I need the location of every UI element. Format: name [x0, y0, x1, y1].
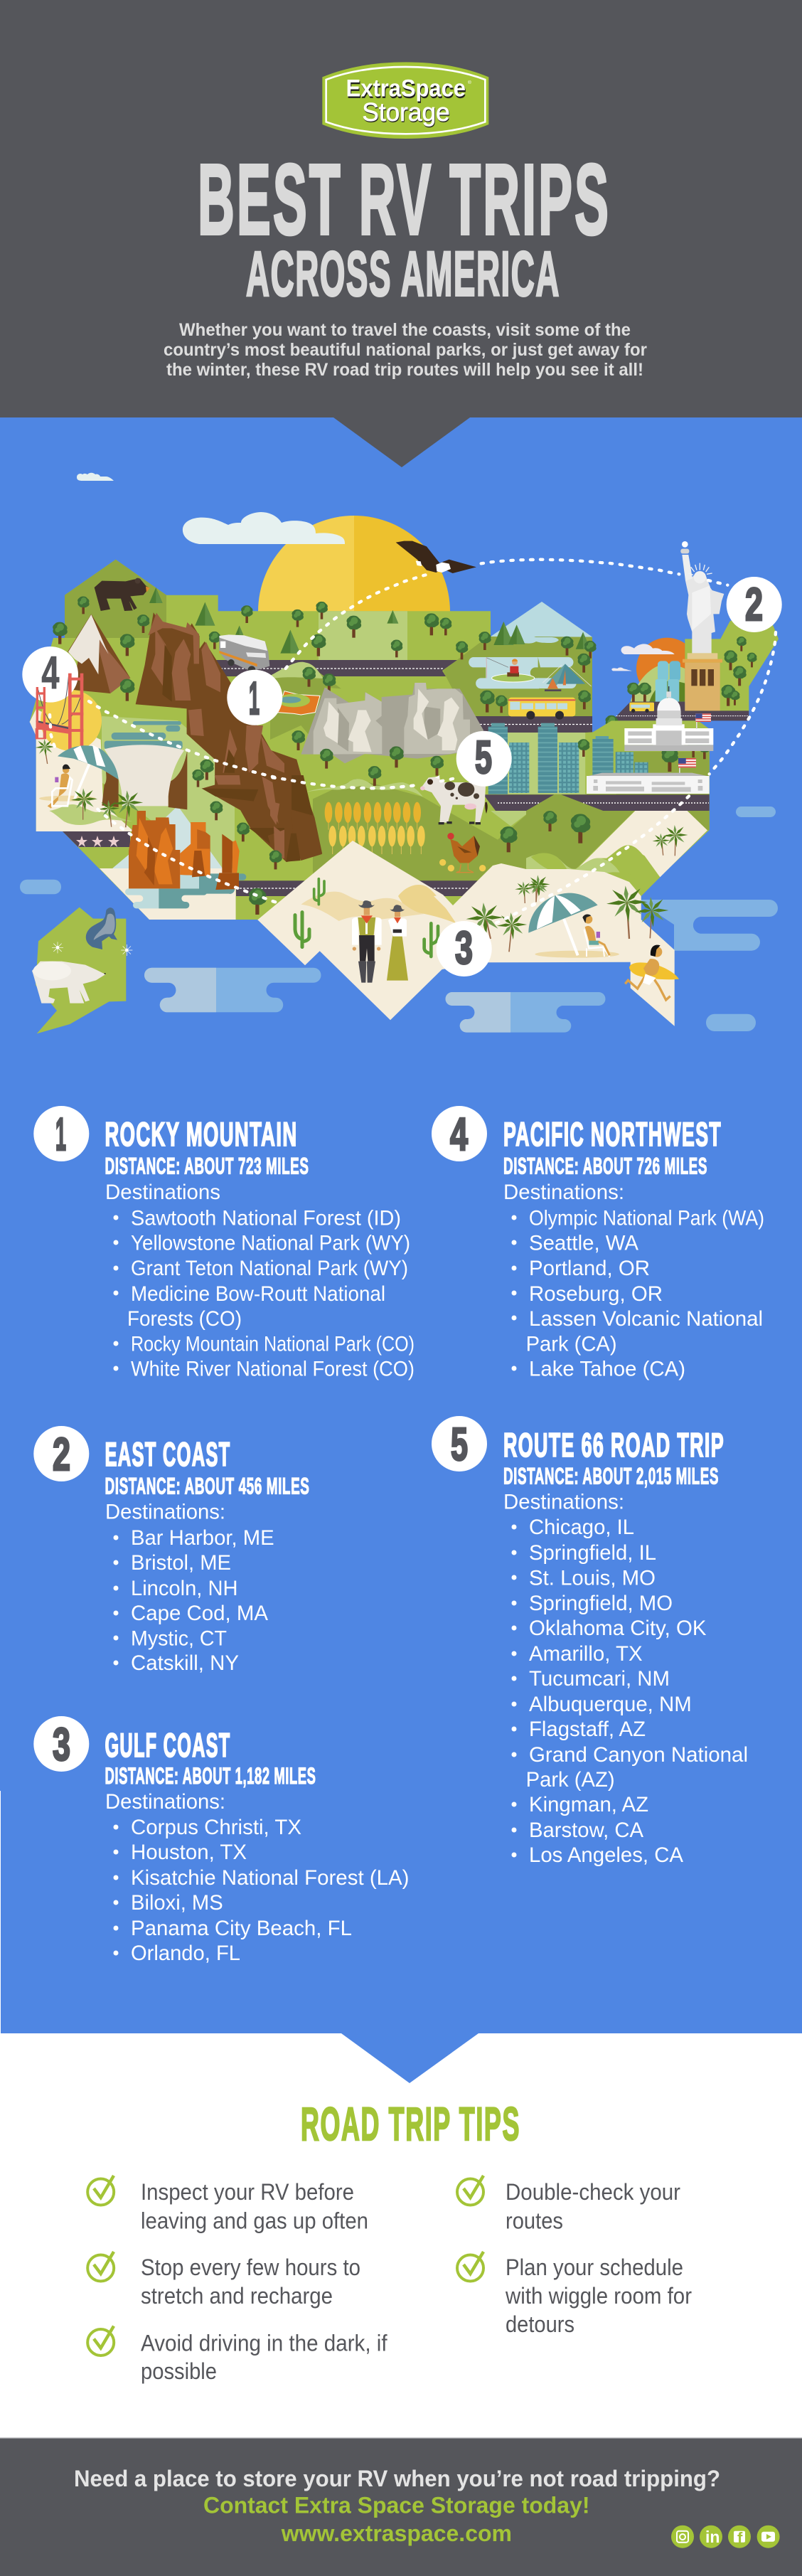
- destination list: Kisatchie National Forest (LA): [131, 1866, 410, 1890]
- intro paragraph: country’s most beautiful national parks, or just get away for: [164, 340, 647, 360]
- map marker 2: 2: [745, 578, 763, 630]
- social icon: linkedin: [700, 2526, 722, 2548]
- large cloud: [183, 512, 345, 544]
- mount rushmore: [301, 683, 483, 763]
- chicken and chicks: [439, 833, 486, 873]
- rock formation: red rocks: [129, 811, 240, 890]
- footer call to action: [74, 2466, 720, 2546]
- rock formation: rocky mountains: [136, 612, 322, 862]
- small bus: [629, 703, 654, 713]
- footer call to action: www.extraspace.com: [281, 2521, 512, 2546]
- alaska: [36, 908, 126, 1033]
- badge 3: 3: [53, 1718, 70, 1770]
- cowboy couple: [352, 900, 408, 983]
- tip 3: [87, 2326, 387, 2384]
- social icon: youtube: [757, 2526, 780, 2548]
- river: [105, 721, 183, 749]
- badge 5: 5: [451, 1418, 468, 1470]
- destination list: Park (AZ): [526, 1768, 615, 1792]
- panel: route 66: [432, 1416, 748, 1867]
- panel: gulf coast route: [33, 1716, 410, 1965]
- destination list: Forests (CO): [127, 1307, 242, 1331]
- destination list: Orlando, FL: [131, 1942, 240, 1965]
- us capitol: [624, 686, 713, 751]
- destination list: Destinations:: [105, 1501, 225, 1524]
- road over farmland: [309, 880, 478, 896]
- polar bear: [32, 962, 106, 1004]
- tip 1: [87, 2176, 368, 2234]
- destination list: Destinations:: [503, 1490, 624, 1513]
- distance: DISTANCE: ABOUT 723 MILES: [105, 1154, 309, 1179]
- badge 5: [432, 1416, 487, 1471]
- distance: DISTANCE: ABOUT 456 MILES: [105, 1474, 310, 1499]
- wheat field: [325, 802, 425, 854]
- destination list: Tucumcari, NM: [529, 1667, 670, 1691]
- route dashes: [50, 560, 776, 925]
- sea patch: gulf of mexico: [446, 992, 606, 1033]
- tip 5: with wiggle room for: [505, 2283, 692, 2309]
- destination list: [105, 1790, 410, 1965]
- statue of liberty on pedestal: [680, 541, 724, 710]
- sea pills: [20, 807, 776, 1031]
- destination list: Amarillo, TX: [529, 1642, 643, 1666]
- destination list: Rocky Mountain National Park (CO): [131, 1333, 415, 1356]
- tip 3: possible: [141, 2358, 217, 2384]
- destination list: Mystic, CT: [131, 1627, 227, 1650]
- map marker 1: 1: [249, 672, 260, 724]
- yellowstone hot spring: [270, 662, 341, 740]
- roads: [63, 660, 710, 896]
- panel: pacific northwest route: [432, 1106, 764, 1381]
- map marker 4: [22, 646, 78, 703]
- map: USA land: [30, 560, 710, 920]
- badge 1: 1: [55, 1108, 66, 1160]
- footer call to action: Contact Extra Space Storage today!: [203, 2493, 590, 2518]
- destination list: Bristol, ME: [131, 1551, 231, 1575]
- destination list: Flagstaff, AZ: [529, 1718, 646, 1741]
- destination list: Kingman, AZ: [529, 1793, 648, 1816]
- destination list: Corpus Christi, TX: [131, 1816, 301, 1839]
- tip 4: Double-check your: [506, 2179, 680, 2205]
- destination list: [105, 1501, 274, 1675]
- destination list: St. Louis, MO: [529, 1567, 656, 1590]
- destination list: Grand Canyon National: [529, 1743, 748, 1767]
- badge 2: [33, 1426, 89, 1481]
- destination list: Biloxi, MS: [131, 1891, 223, 1915]
- beach umbrella and sunbather: [528, 893, 619, 958]
- tip 4: routes: [506, 2208, 563, 2234]
- destination list: Yellowstone National Park (WY): [131, 1232, 410, 1255]
- campsite tent and fire: [542, 664, 592, 691]
- heading: EAST COAST: [105, 1435, 230, 1473]
- blue section background: [0, 417, 802, 2033]
- social icon: facebook: [728, 2526, 751, 2548]
- tip 3: Avoid driving in the dark, if: [141, 2330, 387, 2356]
- check icon: [87, 2176, 114, 2205]
- destination list: Cape Cod, MA: [131, 1602, 268, 1625]
- sun: [258, 516, 450, 612]
- tip 5: [457, 2252, 692, 2337]
- intro paragraph: Whether you want to travel the coasts, visit some of the: [179, 320, 631, 340]
- eagle: [396, 541, 476, 573]
- check icon: [457, 2176, 483, 2205]
- golden gate bridge: [36, 674, 83, 749]
- badge 4: 4: [450, 1108, 468, 1160]
- tip 1: Inspect your RV before: [141, 2179, 354, 2205]
- badge 2: 2: [53, 1428, 70, 1480]
- tip 4: [457, 2176, 680, 2234]
- map marker 5: [456, 731, 512, 787]
- header pointer arrow: [333, 417, 470, 467]
- map marker 5: 5: [475, 731, 492, 783]
- school bus: [508, 698, 575, 720]
- hoover dam: [102, 745, 187, 809]
- tip 1: leaving and gas up often: [141, 2208, 368, 2234]
- trees below rushmore: [320, 746, 444, 786]
- california hill: [49, 804, 133, 825]
- destination list: Houston, TX: [131, 1841, 247, 1864]
- destination list: Park (CA): [526, 1333, 617, 1356]
- olive farmland: [306, 779, 540, 880]
- tip 5: detours: [506, 2311, 574, 2337]
- destination list: Roseburg, OR: [529, 1282, 663, 1306]
- tip 2: Stop every few hours to: [141, 2255, 360, 2280]
- desert dunes: [301, 885, 457, 923]
- destination list: Albuquerque, NM: [529, 1693, 692, 1716]
- social icon: linkedin: in: [705, 2528, 720, 2546]
- social icon: facebook: f: [737, 2529, 743, 2547]
- destination list: Medicine Bow-Routt National: [131, 1282, 385, 1306]
- destination list: Sawtooth National Forest (ID): [131, 1206, 401, 1230]
- sea patch: atlantic: [636, 900, 778, 951]
- destination list: [503, 1181, 764, 1381]
- social icon: instagram: [671, 2526, 694, 2548]
- american flags: [678, 713, 711, 775]
- map: lower regions and beaches: [30, 690, 270, 920]
- intro paragraph: [164, 320, 647, 380]
- heading: road trip tips: ROAD TRIP TIPS: [301, 2097, 520, 2150]
- destination list: Springfield, MO: [529, 1592, 673, 1615]
- destination list: Springfield, IL: [529, 1541, 656, 1565]
- badge 3: [33, 1716, 89, 1772]
- tip 2: [87, 2252, 360, 2309]
- palm trees gulf: [466, 825, 688, 952]
- white house: [587, 773, 710, 794]
- destination list: [503, 1490, 748, 1867]
- pond with fisherman: [469, 657, 577, 688]
- logo: Extra Space Storage: ExtraSpace: [346, 75, 466, 102]
- destination list: [105, 1181, 415, 1381]
- beach scene west: [36, 739, 143, 827]
- check icon: [87, 2252, 114, 2282]
- badge 1: [33, 1106, 89, 1161]
- destination list: Destinations: [105, 1181, 220, 1204]
- destination list: White River National Forest (CO): [131, 1358, 415, 1381]
- destination list: Bar Harbor, ME: [131, 1526, 274, 1550]
- sea patch: gulf of california: [144, 968, 321, 1012]
- map marker 3: [437, 921, 492, 976]
- map marker 1: [227, 670, 282, 725]
- small cloud: [77, 473, 114, 481]
- grizzly bear: [95, 578, 150, 611]
- destination list: Grant Teton National Park (WY): [131, 1257, 408, 1280]
- seal: [86, 908, 117, 949]
- badge 4: [432, 1106, 487, 1161]
- panel: east coast route: [33, 1426, 310, 1675]
- sparkles: [52, 942, 132, 956]
- heading: ROCKY MOUNTAIN: [105, 1115, 297, 1153]
- distance: DISTANCE: ABOUT 1,182 MILES: [105, 1763, 316, 1789]
- lake below red rocks: [125, 873, 246, 908]
- south-east land: [526, 793, 710, 896]
- map: gulf coast and texas beige: [257, 841, 675, 1026]
- intro paragraph: the winter, these RV road trip routes will help you see it all!: [166, 360, 643, 380]
- snowy mountain: [68, 614, 130, 693]
- panel: rocky mountain route: [33, 1106, 415, 1381]
- tip 5: Plan your schedule: [506, 2255, 683, 2280]
- trees: [53, 587, 757, 915]
- surfer: [625, 945, 679, 1000]
- check icon: [87, 2326, 114, 2356]
- cacti: [295, 879, 438, 957]
- tip 2: stretch and recharge: [141, 2283, 333, 2309]
- stars on road: [76, 836, 119, 847]
- map marker 4: 4: [41, 646, 59, 698]
- heading: GULF COAST: [105, 1726, 230, 1764]
- header background: [0, 0, 802, 417]
- destination list: Destinations:: [105, 1790, 225, 1814]
- check icon: [457, 2252, 483, 2282]
- destination list: Oklahoma City, OK: [529, 1617, 707, 1640]
- destination list: Destinations:: [503, 1181, 624, 1204]
- cow: [420, 775, 488, 824]
- map marker 2: [727, 577, 782, 632]
- destination list: Los Angeles, CA: [529, 1843, 683, 1867]
- destination list: Lake Tahoe (CA): [529, 1358, 685, 1381]
- destination list: Panama City Beach, FL: [131, 1917, 352, 1940]
- map: north-east land: [612, 607, 779, 720]
- logo: Extra Space Storage: Storage: [362, 97, 450, 127]
- footer band: [0, 2437, 802, 2576]
- city skyline: [488, 720, 711, 794]
- RV camper: [219, 634, 269, 674]
- white tips background: [0, 2033, 802, 2438]
- footer call to action: Need a place to store your RV when you’re not road tripping?: [74, 2466, 720, 2491]
- destination list: Chicago, IL: [529, 1516, 634, 1539]
- map marker 3: 3: [455, 922, 473, 974]
- logo: Extra Space Storage: ®: [468, 80, 471, 85]
- logo: Extra Space Storage: [322, 62, 488, 139]
- destination list: Seattle, WA: [529, 1232, 638, 1255]
- destination list: Olympic National Park (WA): [529, 1206, 764, 1230]
- blue section pointer arrow: [341, 2033, 478, 2083]
- destination list: Portland, OR: [529, 1257, 650, 1280]
- clouds near statue: [611, 644, 675, 671]
- destination list: Lincoln, NH: [131, 1577, 237, 1600]
- destination list: Catskill, NY: [131, 1651, 239, 1675]
- destination list: Barstow, CA: [529, 1819, 643, 1842]
- destination list: Lassen Volcanic National: [529, 1307, 763, 1331]
